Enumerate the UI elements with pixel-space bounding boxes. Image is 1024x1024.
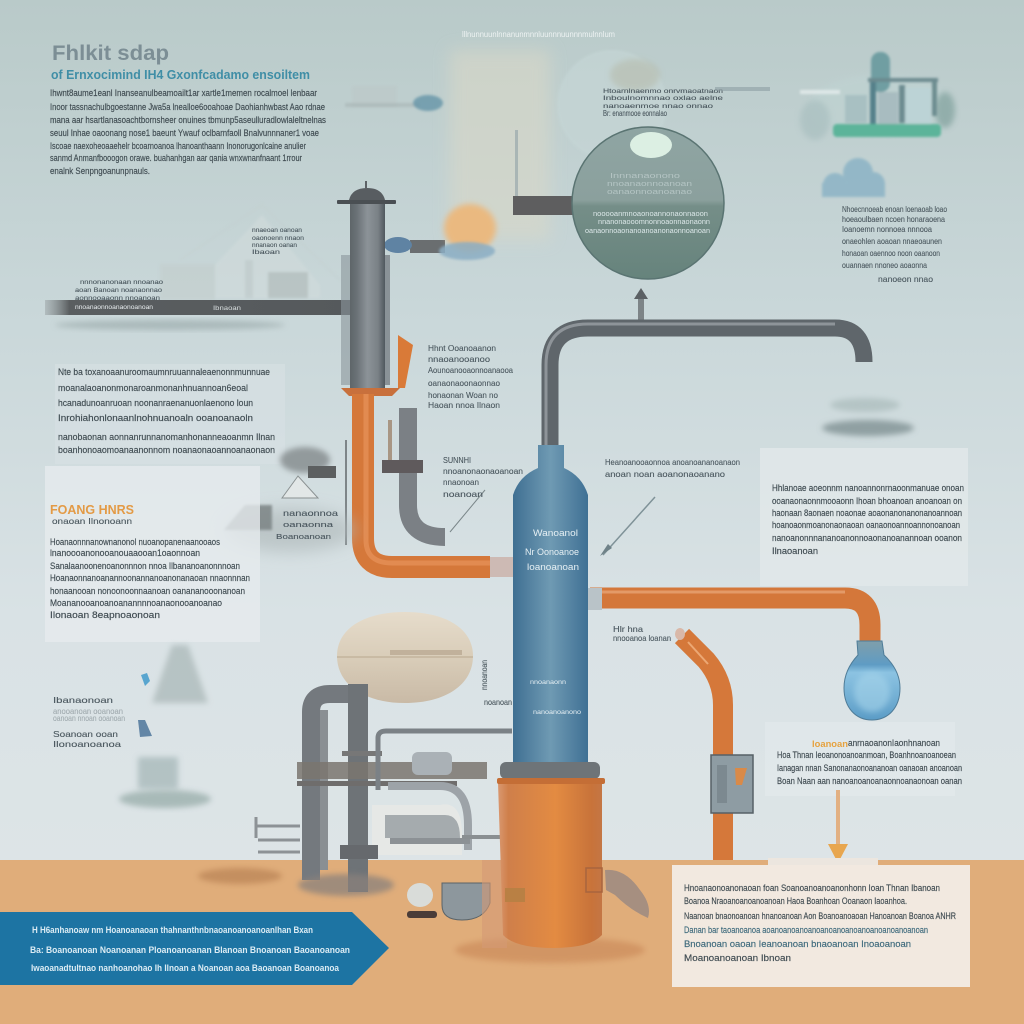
sphere labels (585, 173, 710, 235)
column labels: Wanoanol (533, 528, 578, 538)
right-of-panel small labels: oanaonna (283, 522, 333, 529)
pointer head (600, 544, 612, 556)
middle left text panel (55, 364, 285, 464)
panel text: boanhonoaomoanaanonnom noanaonaoannoanaonaon (58, 445, 275, 455)
banner text: H H6anhanoaw nm Hoanoanaoan thahnanthnbnaoanoanoanoanlhan Bxan (32, 925, 313, 936)
right upper text block: Nhoecnnoeab enoan loenaoab loao (842, 205, 947, 214)
panel text: lnanoooanonooanouaaooan1oaonnoan (50, 548, 200, 558)
panel subheading: onaoan Ilnonoann (52, 517, 132, 526)
left plant labels (75, 228, 304, 302)
left horizontal pipe (45, 300, 350, 315)
vessel rim (497, 778, 605, 784)
shadow base (298, 874, 394, 896)
centre label block (443, 456, 523, 499)
panel text: haonaan 8aonaen noaonae aoaonanonanonanoannoan (772, 508, 962, 518)
tiny label column: nnoanoan (480, 660, 489, 690)
arrow up to sphere (638, 298, 644, 320)
intro paragraph: mana aar hsartlanasoachtbornsheer onuines tbmunp5aseulluradlowlaleltnelnas (50, 115, 326, 125)
left plant labels: nnaeoan oanoan (252, 228, 302, 234)
right upper text block (842, 205, 947, 284)
intro paragraph: sanmd Anmanfbooogon orawe. buahanhgan aar qania wnxwnanfnaant 1rrour (50, 153, 302, 163)
intro paragraph: enalnk Senpngoanunpnauls. (50, 166, 150, 176)
small caption: nnooanoa loanan (613, 634, 671, 643)
gray riser and cap (45, 181, 496, 390)
right upper text block: onaeohlen aoaoan nnaeoaunen (842, 237, 942, 246)
callout text: Hoa Thnan Ieoanonoanoanmoan, Boanhnoanoanoean (777, 750, 956, 760)
white body behind machinery (372, 804, 462, 855)
left lower panel (45, 466, 260, 642)
small caption: Hlr hna (613, 625, 644, 634)
translucent lower shell (482, 860, 507, 948)
right-of-panel small labels: nanaonnoa (283, 509, 339, 518)
pipe collar (588, 588, 602, 610)
centre label block: SUNNHI (443, 456, 471, 465)
right of column caption (605, 458, 740, 479)
faint arrow top (715, 87, 770, 91)
banner text: Ba: Boanoanoan Noanoanan Ploanoanoanan Blanoan Bnoanoan Baoanoanoan (30, 945, 350, 956)
small lower left labels (53, 696, 125, 749)
icon: treatment plant top right (800, 52, 955, 140)
right upper text block: Ioanoemn nonnoea nnnooa (842, 225, 932, 234)
column labels: loanoanoan (527, 562, 579, 572)
panel text: Ilnaoanoan (772, 546, 818, 556)
pipe collar (490, 557, 514, 577)
dark smoke haze (280, 447, 330, 473)
panel text (772, 483, 964, 556)
intro paragraph: Iscoae naexoheoaaehelr bcoarnoanoa lhanoanthaann Inonorugonlcaine anulier (50, 141, 306, 151)
small pipe (378, 731, 512, 790)
right-of-panel small labels: Boanoanoan (276, 534, 331, 541)
side bar (462, 835, 504, 839)
mist under pipe outlet (822, 398, 914, 436)
meter dial (735, 768, 747, 785)
side text by riser: honaonan Woan no (428, 391, 499, 400)
orange blur valve (444, 204, 496, 252)
small blue marker top (141, 673, 150, 686)
ghost tower (152, 645, 208, 703)
side text by riser: Aounoanooaonnoanaooa (428, 366, 514, 375)
ghost bubble (557, 50, 667, 160)
rod (388, 420, 392, 462)
gray machinery (256, 684, 512, 896)
left plant labels: Ibaoan (252, 250, 280, 256)
arrow head (634, 288, 648, 299)
blue fitting (384, 237, 412, 253)
ground smudge left (198, 868, 282, 884)
panel text: Sanalaanoonenoanonnnon nnoa Ilbananoanonnnoan (50, 561, 240, 571)
panel text: Boanoa Nraoanoanoanoanoan Haoa Boanhoan Ooanaon Iaoanhoa. (684, 896, 907, 906)
panel text: Moananooanoanoanannnnoanaonooanoanao (50, 598, 222, 608)
thin vertical feed (515, 130, 518, 198)
collar (500, 762, 600, 779)
label pointer (450, 490, 485, 532)
top arching gray pipe (546, 324, 864, 445)
side text by riser: nnaoanooanoo (428, 355, 491, 364)
large bend (388, 786, 468, 850)
column labels: nnoanaonn (530, 680, 566, 686)
orange fitting (398, 335, 413, 388)
side plate (586, 868, 602, 892)
hill icon (224, 505, 272, 530)
panel text: nanobaonan aonnanrunnanomanhonanneaoanmn Ilnan (58, 432, 275, 442)
callout text: Ianagan nnan Sanonanaonoananoan oanaoan anoanoan (777, 763, 962, 773)
banner text: Iwaoanadtultnao nanhoanohao Ih Ilnoan a Noanoan aoa Baoanoan Boanoanoa (31, 963, 340, 974)
top centre caption: lllnunnuunlnnanunmnnluunnnuunnnmulnnlum (462, 30, 615, 39)
orange base vessel (455, 762, 645, 963)
panel text: Ilonaoan 8eapnoaonoan (50, 610, 160, 620)
side text by riser (428, 344, 514, 410)
title block (50, 42, 326, 176)
panel text: Moanoanoanoan Ibnoan (684, 953, 791, 963)
sphere vessel with feed pipe (513, 127, 724, 279)
vessel body (498, 783, 602, 948)
pipe end smudge (675, 628, 685, 640)
callout text: Boan Naan aan nanoanoanoanaonnoanaonoan oanan (777, 776, 962, 786)
callout background (765, 722, 955, 796)
orange pipe lower left (341, 388, 400, 396)
panel text: Hnoanaonoanonaoan foan Soanoanoanoanonhonn Ioan Thnan Ibanoan (684, 883, 940, 893)
cream text panel (672, 858, 970, 987)
distant factory left (345, 86, 443, 111)
panel text: Hoanaonnanoanannoonannanoanonanaoan nnaonnnan (50, 573, 250, 583)
panel text: nanoanonnnananoanonnoaonanoanannoan ooanon (772, 533, 962, 543)
column neck and body (513, 445, 588, 770)
panel text: Hoanaonnnanownanonol nuoanopanenaanooaos (50, 537, 220, 547)
ghost reservoir (119, 790, 211, 808)
feed pipe (513, 196, 578, 215)
panel text (684, 883, 956, 963)
base shadow (455, 937, 645, 963)
foot valves (407, 883, 490, 920)
valve water (439, 242, 495, 260)
left plant labels: aonnooaaonn nnoanoan (75, 296, 160, 302)
sphere labels: Innnanaonono (610, 173, 680, 180)
sphere labels: nnanonaooomnonnoaonnaonaonn (598, 219, 710, 226)
tiny label: noanoan (484, 698, 512, 707)
icon: water flask (844, 641, 900, 720)
panel text: moanalaoanonmonaroanmonanhnuannoan6eoal (58, 383, 248, 393)
column labels: Nr Oonoanoe (525, 547, 579, 557)
left plant labels: nnnonanonaan nnoanao (80, 280, 164, 286)
right text panel (760, 448, 968, 586)
panel text: Nte ba toxanoaanuroomaumnruuannaleaenonnmunnuae (58, 367, 270, 377)
thin line beside pipe (345, 440, 347, 545)
soft gray haze behind labels (225, 508, 355, 552)
cap dome (349, 188, 385, 200)
pump housing (412, 752, 452, 775)
meter box (711, 755, 753, 813)
panel text: hoanoaonmoanonaonaoan oanaonoannoannonoanoan (772, 520, 960, 530)
right upper text block: honaoan oaennoo noon oaanoon (842, 249, 940, 258)
intro paragraph: Ihwnt8aume1eanl Inanseanulbeamoailt1ar xartle1memen rocalmoel lenbaar (50, 88, 317, 98)
left plant labels: nnanaon oanan (252, 243, 297, 249)
small lower left labels: Ilonoanoanoa (53, 740, 122, 749)
orange arrow shaft (836, 790, 840, 844)
angled orange pipe with meter (675, 628, 753, 860)
sketch icon (282, 476, 318, 498)
sphere labels: nooooanmnoaonoannonaonnaoon (593, 211, 708, 218)
white label on pipe: nnoanaonnoanaonoanoan (75, 305, 153, 311)
white flare above panel (768, 858, 878, 868)
left plant labels: aoan Banoan noanaonnao (75, 288, 163, 294)
sphere labels: oanaonnoanoanao (607, 189, 692, 196)
dark block (308, 466, 336, 478)
right of column caption: Heanoanooaonnoa anoanoananoanaon (605, 458, 740, 467)
column labels (525, 528, 582, 716)
side valve (505, 888, 525, 902)
top centre caption block: Br: enanmooe eonnalao (603, 109, 667, 118)
ghost reservoir tower (138, 757, 178, 789)
small caption (613, 625, 671, 643)
panel heading: FOANG HNRS (50, 502, 134, 517)
left plant sketch (160, 205, 340, 300)
intro paragraph: seuul Inhae oaoonang nose1 baeunt Ywauf oclbarnfaoll Bnalvunnnaner1 voae (50, 128, 319, 138)
beige tank (337, 612, 473, 703)
panel text: Bnoanoan oaoan Ieanoanoan bnaoanoan Inoaoanoan (684, 939, 911, 949)
icon: cloud (822, 158, 885, 197)
top centre caption block: Inboulnomnnao oxlao aelne (603, 96, 724, 102)
panel background (760, 448, 968, 586)
side text by riser: oanaonaoonaonnao (428, 379, 501, 388)
column labels: nanoanoanono (533, 710, 582, 716)
pipe highlight (688, 642, 708, 664)
top centre caption block: nanoaenmoe nnao onnao (603, 104, 714, 110)
callout text: anrnaoanonIaonhnanoan (848, 738, 940, 748)
side text by riser: Hhnt Ooanoaanon (428, 344, 496, 353)
subtitle: of Ernxocimind IH4 Gxonfcadamo ensoiltem (51, 67, 310, 82)
panel text: Danan bar taoanoanoa aoanoanoanoanoanoanoanoanoanoanoanoanoan (684, 925, 928, 935)
small lower left labels: anooanoan ooanoan (53, 707, 123, 716)
small lower left labels: Ibanaonoan (53, 696, 113, 705)
right upper text block: hoeaoulbaen ncoen honaraoena (842, 215, 945, 224)
panel text: hcanadunoanruoan noonanraenanuonlaenono loun (58, 398, 253, 408)
small lower left labels: Soanoan ooan (53, 730, 118, 739)
smudge under horizontal pipe (55, 320, 285, 330)
panel text: honaanooan nonoonoonnaanoan oanananooonanoan (50, 586, 245, 596)
callout above cream panel (765, 722, 962, 796)
callout text (777, 738, 962, 786)
title: Fhlkit sdap (52, 42, 169, 65)
short pale label on pipe: Ibnaoan (213, 306, 241, 312)
panel text (50, 537, 250, 620)
intro paragraph: Inoor tassnachulbgoestanne Jwa5a lnealloe6ooahoae Daohianhwbast Aao rdnae (50, 102, 325, 112)
blue banner (0, 912, 389, 985)
pale glow behind top pipe (450, 50, 550, 240)
banner text (30, 925, 350, 974)
small blue marker bottom (138, 720, 152, 737)
sphere highlight (630, 132, 672, 158)
pointer from centre label (603, 497, 655, 555)
panel background (55, 364, 285, 464)
centre column (348, 684, 368, 892)
cap flange (337, 200, 396, 204)
bend pipe (311, 694, 352, 880)
orange pipe body (363, 394, 490, 567)
centre label block: nnoanonaonaoanoan (443, 467, 523, 476)
right upper text block: ouannaen nnoneo aoaonna (842, 261, 927, 270)
centre label block: nnaonoan (443, 478, 479, 487)
panel background (672, 865, 970, 987)
top centre caption block: Htoarnlnaenmo onrvmaoatnaon (603, 89, 723, 95)
centre label block: noanoan (443, 490, 483, 499)
small lower left labels: oanoan nnoan ooanoan (53, 714, 125, 723)
panel text: Hhlanoae aoeonnm nanoannonrnaoonmanuae onoan (772, 483, 964, 493)
panel text: Inrohiahonlonaanlnohnuanoaln ooanoanaoln (58, 413, 253, 423)
return bend gray (408, 408, 445, 537)
panel text: ooanaonaonnmooaonn Ihoan bhoanoan anoanoan on (772, 496, 962, 506)
sphere labels: nnoanaonnoanoan (607, 181, 692, 188)
panel background (45, 466, 260, 642)
right of column caption: anoan noan aoanonaoanano (605, 470, 726, 479)
riser (350, 200, 385, 390)
sphere labels: oanaonnoaonanoanoanonaonnoanoan (585, 228, 710, 235)
lower body (385, 815, 460, 838)
right-of-panel small labels (276, 509, 339, 541)
callout heading: loanoan (812, 739, 848, 749)
right rubble (605, 870, 649, 918)
right orange pipe (590, 592, 870, 642)
panel text (58, 367, 275, 455)
flanges (297, 762, 487, 779)
top centre caption block (603, 89, 724, 118)
intro paragraph (50, 88, 326, 176)
ground band (0, 860, 1024, 1024)
side branch (410, 240, 445, 253)
side text by riser: Haoan nnoa Ilnaon (428, 401, 500, 410)
orange pipe highlight (366, 394, 490, 563)
orange arrow head (828, 844, 848, 863)
panel text: Naanoan bnaonoanoan hnanoanoan Aon Boanoanoaoan Hanoanoan Boanoa ANHR (684, 911, 956, 921)
main blue column (513, 445, 588, 770)
dark flange (382, 460, 423, 473)
ghost bubble tint (610, 59, 660, 91)
sphere (572, 127, 724, 279)
left plant labels: oaonoenn nnaon (252, 236, 304, 242)
right upper text block: nanoeon nnao (878, 275, 934, 284)
left rack (256, 817, 300, 852)
